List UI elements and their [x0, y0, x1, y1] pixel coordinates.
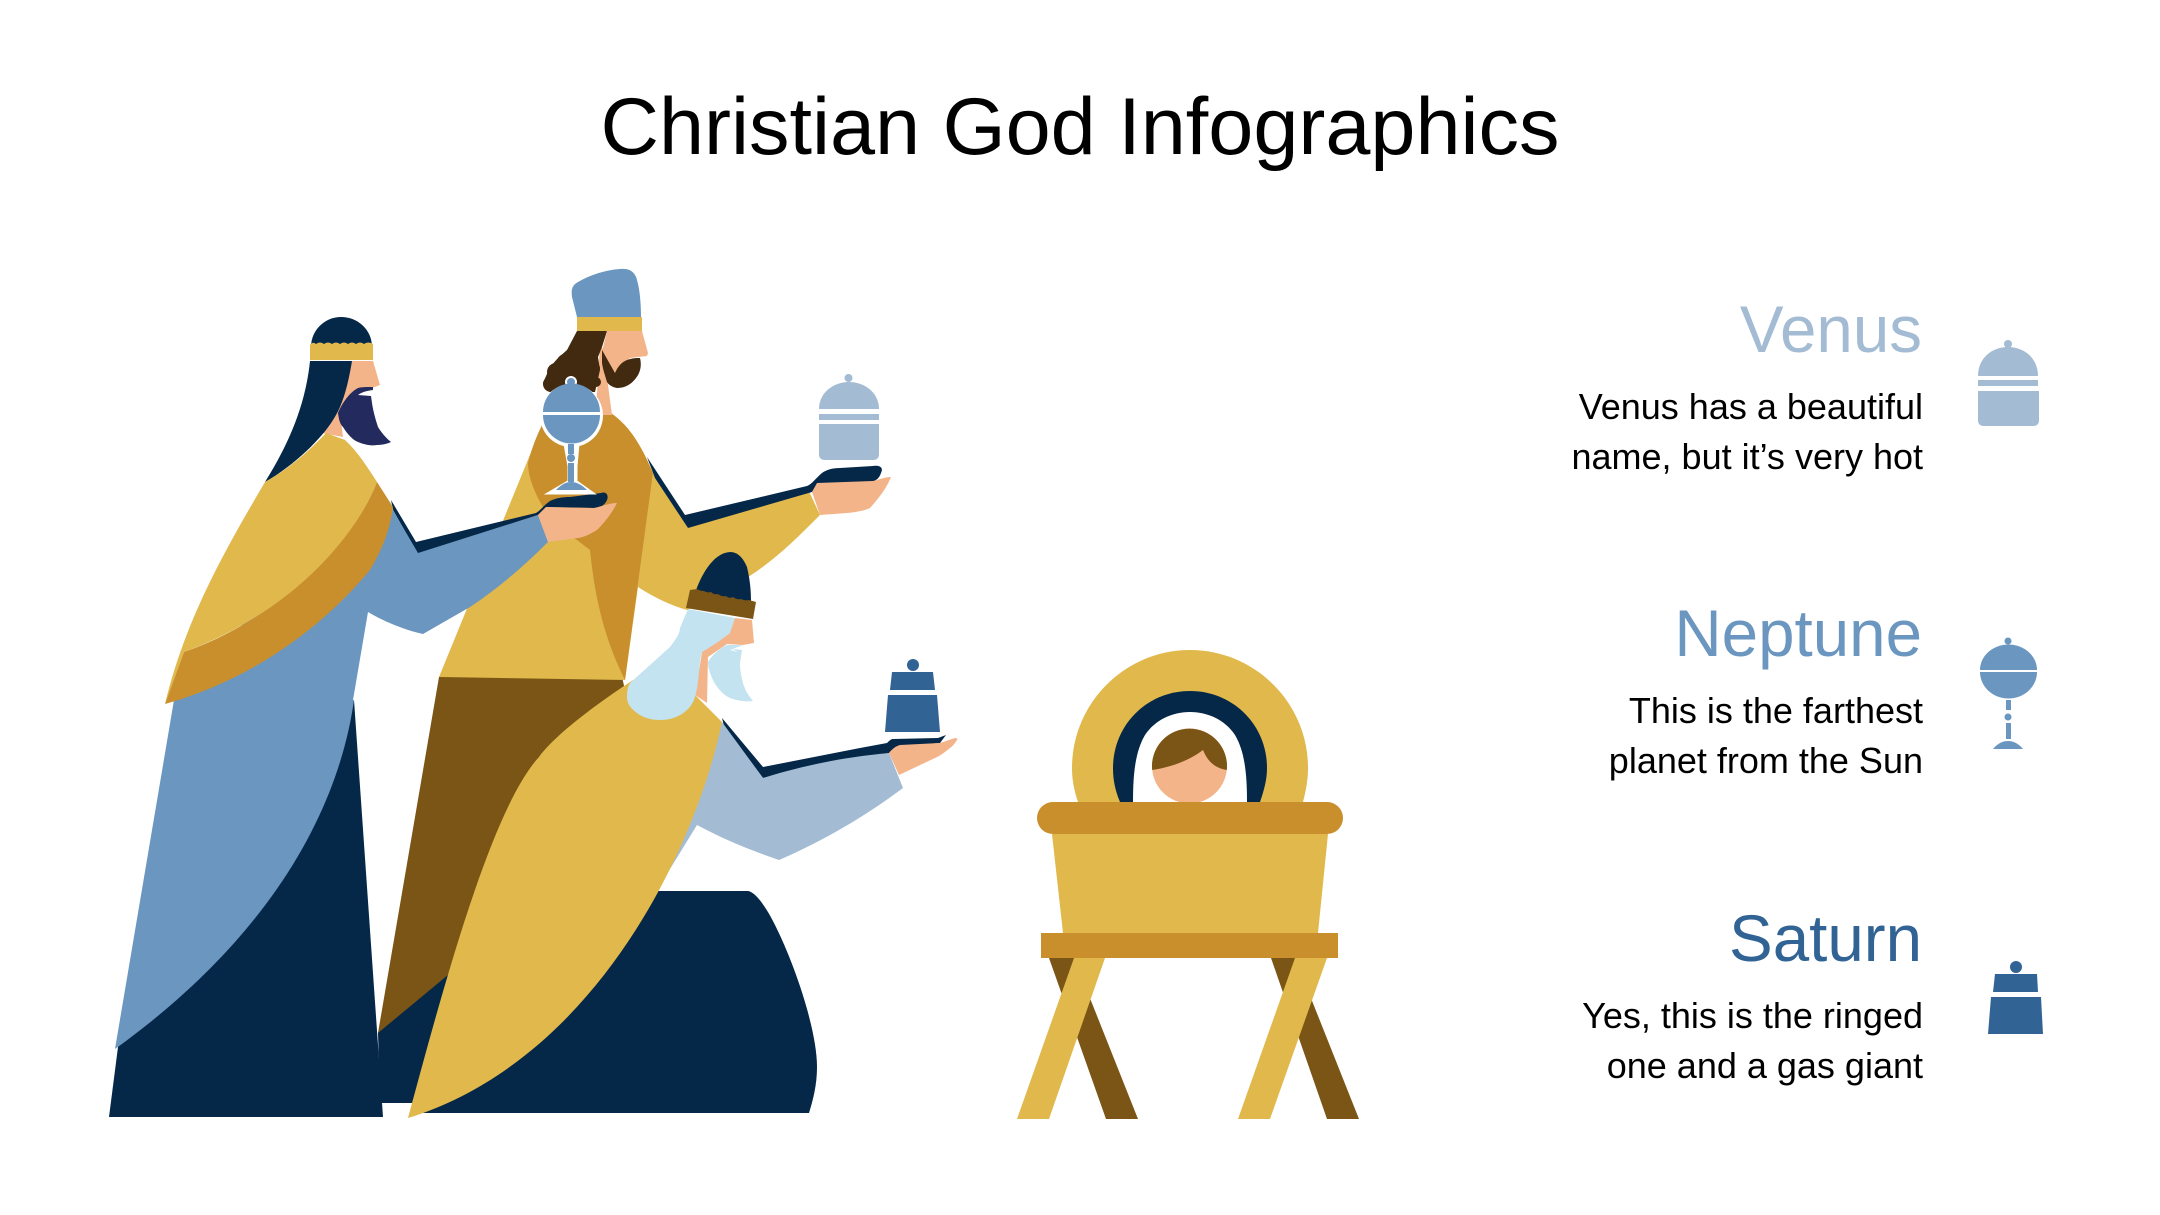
seat navy robe [415, 891, 817, 1113]
front legs [1017, 958, 1105, 1119]
panel: Saturn [1582, 902, 2043, 1086]
crib plank [1041, 933, 1338, 958]
arm shadow [391, 492, 608, 554]
illustration: third wise man (kneeling) [408, 552, 957, 1118]
face and neck [695, 618, 754, 703]
illustration: gift pot held by second wise man [819, 374, 879, 460]
crib rim [1037, 802, 1343, 834]
description: name, but it’s very hot [1571, 436, 1923, 477]
hair [627, 609, 735, 720]
hair [265, 361, 352, 482]
hand [538, 503, 617, 542]
arm shadow and sleeve [647, 457, 882, 528]
description: This is the farthest [1629, 690, 1923, 731]
lower robe [378, 677, 625, 1033]
icon: pot [1978, 340, 2039, 426]
child hair [1152, 729, 1227, 770]
child face [1152, 728, 1227, 804]
illustration: gift goblet held by first wise man [542, 377, 600, 492]
hat band [310, 342, 373, 360]
navy hem [378, 965, 470, 1103]
white cloth [1133, 712, 1247, 802]
icon: goblet [1980, 638, 2037, 749]
hand [889, 738, 957, 775]
description: one and a gas giant [1607, 1045, 1923, 1086]
neck and face [322, 361, 380, 437]
face [602, 331, 648, 373]
description: Venus has a beautiful [1579, 386, 1923, 427]
heading: Saturn [1729, 902, 1922, 975]
beard [338, 387, 391, 445]
torso and arm [175, 507, 548, 700]
description: Yes, this is the ringed [1582, 995, 1923, 1036]
hat [572, 269, 641, 317]
hat band [577, 317, 642, 331]
illustration: second wise man (standing, centre) [378, 269, 891, 1103]
crib box [1052, 834, 1328, 933]
navy veil [1113, 691, 1267, 802]
centre sash [528, 407, 653, 680]
body robe [439, 413, 653, 680]
heading: Venus [1740, 293, 1922, 366]
hat [311, 317, 372, 347]
back legs [1049, 958, 1138, 1119]
lower robe blue [115, 700, 354, 1049]
hand [812, 477, 891, 515]
icon: jar [1988, 961, 2043, 1034]
arm shadow [722, 718, 946, 778]
arm [640, 722, 903, 895]
right arm [625, 473, 820, 680]
shawl trim [165, 482, 393, 704]
neck [595, 345, 612, 415]
beard [602, 350, 641, 388]
lower robe navy [109, 700, 383, 1117]
illustration: gift jar held by third wise man [885, 659, 940, 732]
description: planet from the Sun [1609, 740, 1923, 781]
heading: Neptune [1674, 597, 1922, 670]
illustration: first wise man (standing, left) [109, 317, 617, 1117]
title: Christian God Infographics [600, 82, 1560, 172]
halo [1072, 650, 1308, 802]
hat fur band [686, 589, 756, 619]
beard [708, 645, 753, 701]
illustration: manger with child [1017, 650, 1359, 1119]
hair [543, 331, 607, 392]
shawl [165, 433, 377, 704]
hat [695, 552, 751, 603]
panel: Venus [1571, 293, 2039, 477]
robe [408, 680, 722, 1118]
panel: Neptune [1609, 597, 2037, 781]
